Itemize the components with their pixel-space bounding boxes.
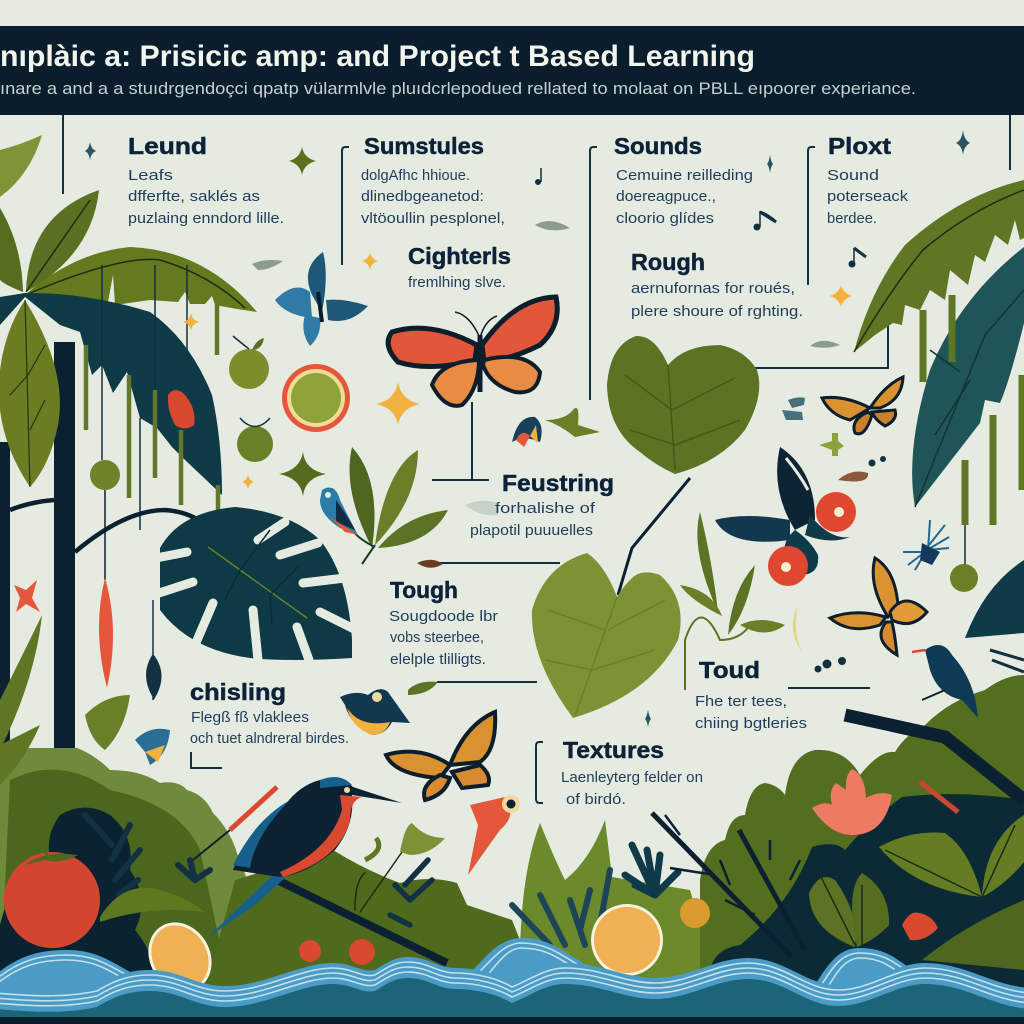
- spiky olive hills: [520, 820, 720, 990]
- green fruit: [237, 426, 273, 462]
- red flower small: [768, 546, 808, 586]
- back crests: [0, 938, 915, 1005]
- red flowers: [299, 940, 321, 962]
- red plume: [193, 830, 230, 860]
- sparkles: [289, 147, 316, 175]
- fruit foreground: [4, 795, 710, 1003]
- block: Textures: [561, 737, 703, 808]
- block: Toud: Fhe ter tees,: [695, 694, 787, 710]
- block: Sumstules: dolgAfhc hhioue.: [361, 168, 470, 184]
- red beak bird: [468, 797, 510, 875]
- blue fern left: [512, 870, 610, 945]
- leaf: [100, 888, 205, 922]
- subtitle: ınare a and a a stuıdrgendoçci qpatp vülarmlvle pluıdcrlepodued rellated to molaat on PBLL eıpoorer experiance.: [0, 79, 916, 98]
- block: Ploxt: Ploxt: [828, 133, 891, 159]
- far olive hills: [0, 748, 290, 990]
- block: chisling: och tuet alndreral birdes.: [190, 731, 349, 747]
- note: [854, 248, 866, 257]
- brown seed: [838, 472, 868, 481]
- palm tree left: [0, 135, 257, 858]
- olive hook: [365, 838, 379, 860]
- block: Feustring: [470, 470, 614, 539]
- block: Ploxt: poterseack: [827, 189, 909, 205]
- coral flower: [812, 769, 892, 835]
- block: Feustring: forhalishe of: [495, 501, 596, 517]
- main frond: [0, 300, 60, 487]
- lime slice: [282, 364, 350, 432]
- header banner: [0, 26, 1024, 115]
- blue spiky bird: [903, 520, 949, 570]
- block: Toud: Toud: [699, 657, 760, 683]
- block: Sumstules: vltöoullin pesplonel,: [361, 211, 505, 227]
- block: Sounds: Sounds: [614, 133, 702, 159]
- block: Feustring: Feustring: [502, 470, 614, 496]
- navy ferns left: [85, 815, 210, 895]
- star red: [14, 580, 40, 612]
- orange butterfly right: [830, 558, 927, 655]
- block: Rough: plere shoure of rghting.: [631, 304, 803, 320]
- hanging moss: [86, 305, 218, 520]
- red flower low: [902, 912, 938, 940]
- sprig with bird left of center: [320, 447, 448, 564]
- orange butterfly lower: [386, 712, 495, 800]
- bush layers: [0, 675, 1024, 990]
- red tassel: [104, 490, 106, 580]
- block: Sumstules: [361, 133, 505, 227]
- block: Textures: of birdó.: [566, 792, 626, 808]
- palm trunks: [54, 342, 75, 835]
- bird blue: [135, 729, 170, 765]
- pendant leaf: [147, 600, 161, 700]
- dark canopy: [0, 293, 222, 495]
- branch vine: [10, 500, 213, 552]
- olive bush right: [700, 675, 1024, 990]
- block: Leund: Leafs: [128, 168, 173, 184]
- block: Cighterls: Cighterls: [408, 243, 511, 269]
- block: Textures: Laenleyterg felder on: [561, 770, 703, 786]
- block: Rough: Rough: [631, 249, 705, 275]
- block: Cighterls: [408, 243, 511, 291]
- heart leaf upper: [607, 336, 759, 595]
- block: chisling: [190, 679, 349, 747]
- block: Sumstules: dlinedbgeanetod:: [361, 189, 484, 205]
- block: chisling: Flegß fß vlaklees: [191, 710, 309, 726]
- grey-blue stones: [782, 397, 805, 420]
- block: Ploxt: berdee.: [827, 211, 877, 227]
- sprig right of center leaves: [680, 397, 886, 690]
- grey leaf flecks: [252, 260, 283, 270]
- body: [233, 778, 402, 877]
- block: Leund: Leund: [128, 133, 207, 159]
- kingfisher large: [193, 777, 447, 963]
- block: Leund: [128, 133, 284, 227]
- block: Sounds: doereagpuce.,: [616, 189, 716, 205]
- note: [540, 168, 542, 182]
- teal water: [0, 978, 1024, 1024]
- block: Sumstules: Sumstules: [364, 133, 484, 159]
- block: Ploxt: Sound: [827, 168, 879, 184]
- kingfisher right: [912, 645, 978, 718]
- dark foliage: [0, 808, 153, 990]
- water waves: [0, 938, 1024, 1024]
- block: Leund: puzlaing enndord lille.: [128, 211, 284, 227]
- block: Ploxt: [827, 133, 909, 227]
- orange slice: [136, 911, 224, 1003]
- moon: [793, 605, 802, 652]
- block: Tough: [389, 577, 498, 668]
- orange butterfly upper right: [822, 377, 903, 434]
- bird round: [340, 689, 410, 735]
- tulip bud: [400, 823, 445, 855]
- block: Leund: dfferfte, saklés as: [128, 189, 260, 205]
- leaf marker: [408, 682, 438, 695]
- block: Cighterls: fremlhing slve.: [408, 275, 506, 291]
- yellow flower: [680, 898, 710, 928]
- music notes: [252, 168, 866, 515]
- block: Tough: elelple tlilligts.: [390, 652, 486, 668]
- plant stem with bud: [355, 852, 402, 912]
- front wave: [0, 957, 1024, 1024]
- block: Textures: Textures: [563, 737, 664, 763]
- red fern: [920, 782, 958, 812]
- back crest stripes: [0, 943, 915, 990]
- heart leaf lower: [532, 553, 681, 718]
- note: [760, 212, 776, 222]
- fruit: [950, 564, 978, 592]
- block: Rough: [631, 249, 803, 320]
- front wave stripes: [0, 962, 1024, 1006]
- palm fronds: [0, 135, 42, 197]
- branch: [277, 880, 447, 963]
- block: Sounds: [614, 133, 753, 227]
- red bird hanging: [168, 390, 195, 428]
- fruits and sparkles: [85, 130, 970, 727]
- tomato: [4, 852, 100, 948]
- dark butterfly with red flowers: [715, 447, 856, 586]
- block: Rough: aernufornas for roués,: [631, 281, 795, 297]
- red flower: [816, 492, 856, 532]
- fern: [922, 900, 1024, 970]
- red belly: [280, 795, 362, 877]
- block: Toud: chiing bgtleries: [695, 716, 807, 732]
- olive frond: [854, 180, 1024, 352]
- navy sprig center: [390, 860, 432, 925]
- leaf cluster bottom right: [809, 769, 1024, 970]
- block: Tough: vobs steerbee,: [390, 630, 484, 646]
- hanging strands: [923, 295, 1022, 525]
- blue bird perched: [320, 488, 358, 535]
- teal lower leaf: [965, 560, 1024, 638]
- block: Toud: [695, 657, 807, 732]
- fern right: [990, 650, 1024, 672]
- branches right: [652, 715, 1024, 957]
- title: nıplàic a: Prisicic amp: and Project t Based Learning: [0, 40, 755, 73]
- connector lines and brackets: [63, 115, 1010, 803]
- block: Tough: Sougdoode lbr: [389, 609, 498, 625]
- blue butterfly: [275, 252, 368, 346]
- monarch butterfly: [388, 297, 557, 406]
- tail: [207, 865, 285, 938]
- block: Sounds: cloorio glídes: [616, 211, 714, 227]
- navy bush right: [709, 794, 1024, 990]
- olive canopy frond: [26, 247, 257, 312]
- hanging strings: [102, 265, 187, 530]
- block: Sounds: Cemuine reilleding: [616, 168, 753, 184]
- small bird and sprig center: [512, 408, 600, 447]
- hanging fruit: [90, 460, 120, 490]
- teal leaf: [912, 247, 1024, 507]
- right canopy: [854, 180, 1024, 672]
- monstera leaf: [156, 507, 356, 660]
- green apple: [229, 349, 269, 389]
- block: chisling: chisling: [190, 679, 286, 705]
- fern low left: [0, 615, 130, 785]
- small birds lower left: [135, 560, 443, 765]
- block: Tough: Tough: [390, 577, 458, 603]
- sprig leaves: [350, 447, 374, 548]
- orange slice right: [591, 904, 663, 976]
- stem: [618, 478, 690, 595]
- teal fern: [625, 845, 678, 895]
- label texts: [128, 133, 909, 808]
- fern sprigs: [85, 815, 678, 945]
- block: Feustring: plapotil puuuelles: [470, 523, 593, 539]
